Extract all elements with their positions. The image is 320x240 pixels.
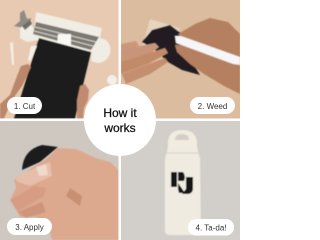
label: 4. Ta-da!: 4. Ta-da! <box>196 224 226 232</box>
icon: black vinyl <box>142 25 200 75</box>
icon: small tape roll <box>107 75 117 85</box>
icon: transfer sheet <box>142 19 180 52</box>
icon: bottle logo <box>171 172 193 194</box>
icon: left hand fingers <box>121 41 168 84</box>
icon: bottle handle <box>168 130 197 146</box>
panel: step 4 ta-da <box>121 121 240 240</box>
icon: right hand <box>175 18 240 94</box>
icon: right hand <box>77 84 89 118</box>
center circle: how it works <box>84 84 156 156</box>
center circle: how it works: works <box>103 121 136 135</box>
label: 1. Cut: 1. Cut <box>14 102 36 111</box>
icon: cutting machine <box>22 12 110 63</box>
icon: thumbnail <box>36 164 48 176</box>
icon: weeding pen <box>10 42 14 65</box>
icon: hand <box>10 148 118 240</box>
icon: black mat <box>14 38 91 118</box>
label: 3. Apply: 3. Apply <box>15 223 44 232</box>
icon: white weeding pen <box>175 36 240 65</box>
panel: step 2 weed <box>121 0 240 118</box>
icon: left hand <box>0 64 31 118</box>
icon: black decal <box>22 145 58 170</box>
center circle: how it works: How it <box>103 106 137 120</box>
icon: left side strip <box>28 46 37 62</box>
panel: step 1 cut <box>0 0 118 118</box>
icon: tool cup <box>14 10 34 41</box>
panel: step 3 apply <box>0 121 118 240</box>
label: 2. Weed: 2. Weed <box>198 102 227 111</box>
icon: bottle body <box>165 146 201 235</box>
